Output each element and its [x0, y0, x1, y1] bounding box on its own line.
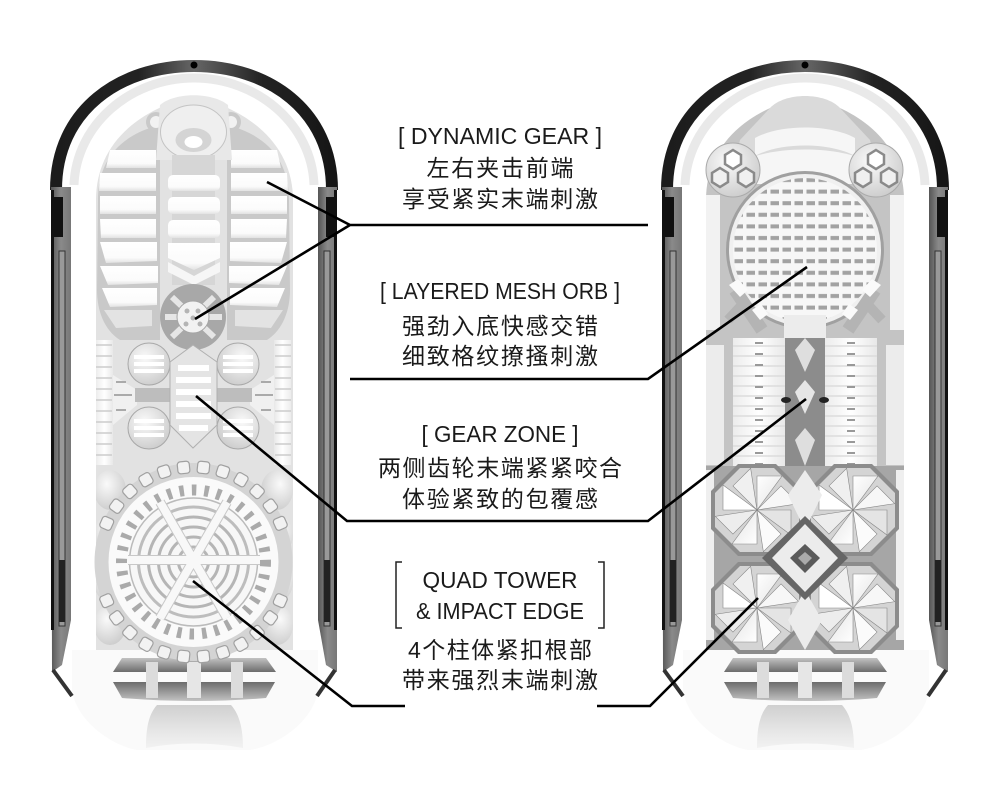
text block: gear zone: [ GEAR ZONE ]	[422, 421, 578, 447]
side edge strips	[706, 470, 904, 640]
text block: layered mesh orb: 强劲入底快感交错	[402, 313, 598, 339]
top nozzle	[156, 95, 232, 160]
text block: dynamic gear: 享受紧实末端刺激	[402, 186, 598, 212]
leader line: gear zone	[196, 396, 806, 521]
text block: layered mesh orb	[380, 278, 620, 369]
text block: gear zone	[378, 421, 622, 512]
mesh orb detail	[160, 284, 226, 350]
orb struts	[728, 290, 882, 330]
text block: quad tower and impact edge: 带来强烈末端刺激	[402, 667, 598, 693]
product cutaway: left view	[51, 62, 337, 750]
text block: dynamic gear	[398, 123, 602, 212]
disc knob ring	[99, 461, 288, 663]
leader line: layered mesh orb	[350, 267, 807, 379]
text block: quad tower and impact edge: & IMPACT EDGE	[416, 598, 584, 624]
inner cavity: right view	[706, 96, 904, 650]
quad towers	[711, 464, 899, 654]
text block: quad tower and impact edge: 4个柱体紧扣根部	[408, 637, 592, 663]
dome bands	[730, 96, 880, 184]
side ribs	[706, 195, 904, 465]
text block: dynamic gear: 左右夹击前端	[426, 155, 574, 181]
text block: layered mesh orb: [ LAYERED MESH ORB ]	[380, 278, 620, 304]
text block: quad tower and impact edge: QUAD TOWER	[422, 567, 578, 593]
inner cavity: left view	[96, 96, 293, 650]
leader line: dynamic gear	[195, 182, 648, 319]
impact edge diamonds	[762, 470, 848, 650]
text block: gear zone: 两侧齿轮末端紧紧咬合	[378, 455, 622, 481]
hex balls	[706, 143, 903, 197]
outer shell: right view	[662, 62, 948, 750]
gear columns and side balls: left view	[94, 112, 293, 645]
layered mesh orb	[726, 171, 884, 329]
orb strut caps	[729, 279, 881, 320]
lower backing	[706, 466, 904, 650]
gear disc	[94, 461, 292, 663]
gear zone	[733, 338, 877, 468]
leader line: quad tower right	[597, 598, 758, 706]
centre hex gear	[170, 345, 217, 448]
centre column	[168, 155, 220, 285]
leader line: quad tower left	[193, 581, 405, 706]
text block: layered mesh orb: 细致格纹撩搔刺激	[402, 343, 598, 369]
text block: dynamic gear: [ DYNAMIC GEAR ]	[398, 123, 602, 149]
text block: gear zone: 体验紧致的包覆感	[402, 486, 598, 512]
outer shell: left view	[51, 62, 337, 750]
product cutaway: right view	[662, 62, 948, 750]
central stem	[784, 315, 826, 338]
text block: quad tower and impact edge	[396, 562, 604, 693]
